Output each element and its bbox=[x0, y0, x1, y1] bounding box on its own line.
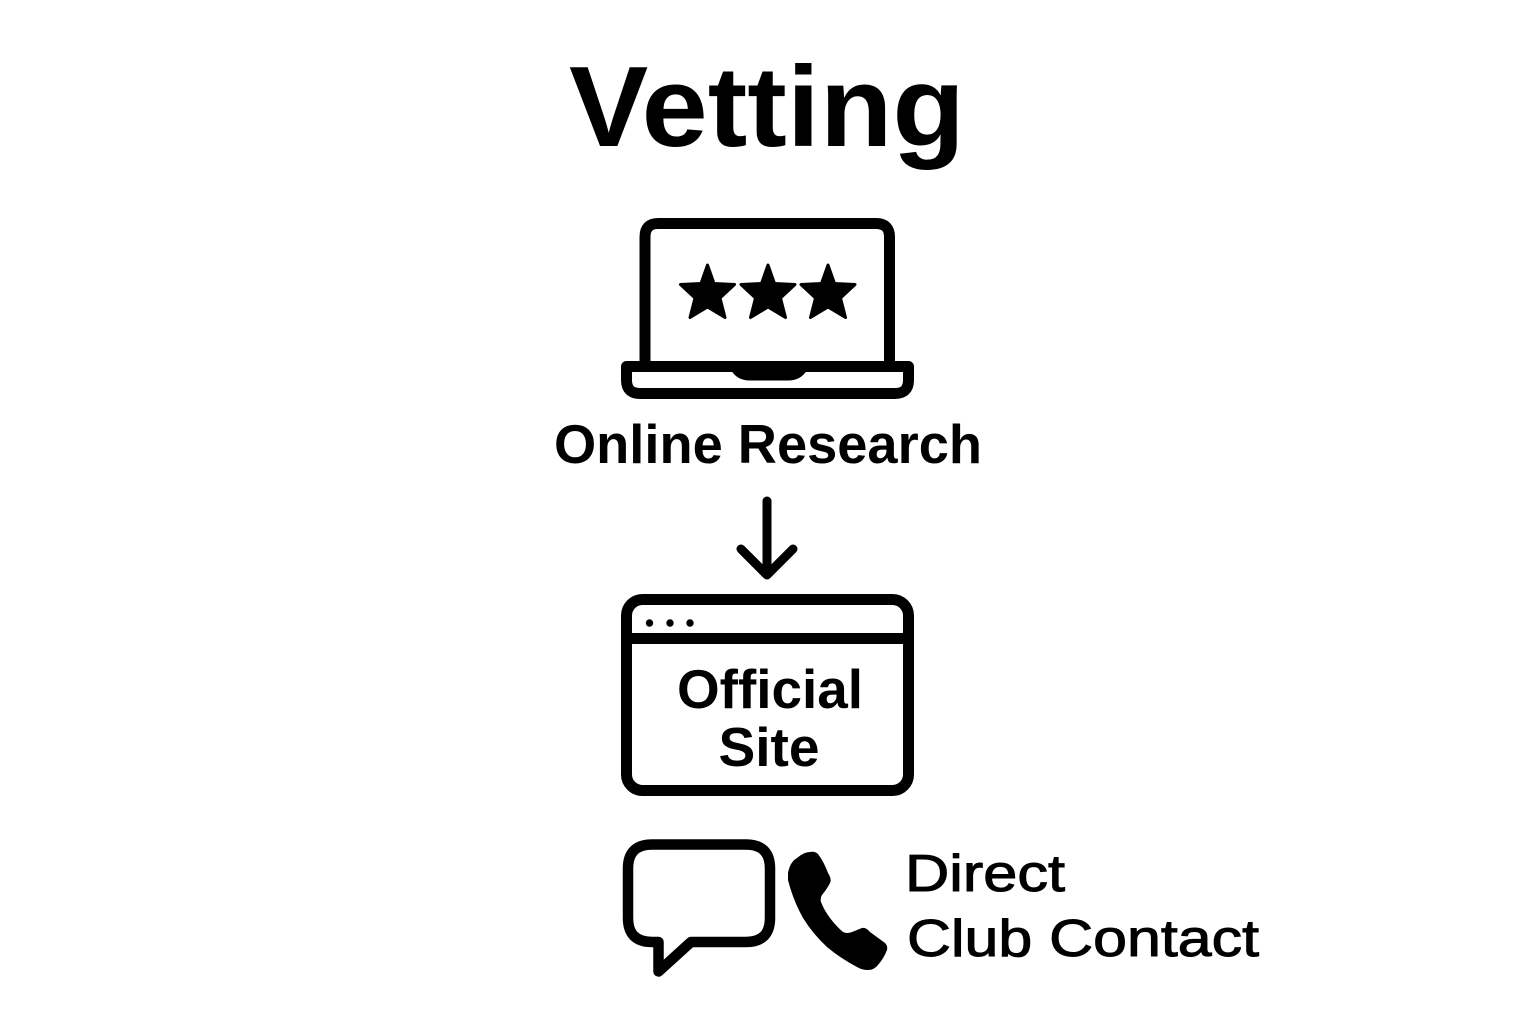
label: club contact: Club Contact bbox=[907, 910, 1260, 968]
arrow: down bbox=[741, 501, 793, 575]
icon: browser window with official site label bbox=[626, 600, 908, 790]
label: direct: Direct bbox=[905, 845, 1066, 903]
icon: speech bubble bbox=[628, 844, 770, 972]
label: site: Site bbox=[718, 716, 820, 778]
title: Vetting bbox=[569, 44, 965, 171]
icon: laptop with three stars bbox=[626, 224, 908, 394]
label: direct club contact bbox=[905, 845, 1260, 968]
label: official: Official bbox=[677, 658, 863, 720]
heading: online research: Online Research bbox=[554, 413, 982, 475]
icon: telephone handset bbox=[788, 852, 887, 970]
